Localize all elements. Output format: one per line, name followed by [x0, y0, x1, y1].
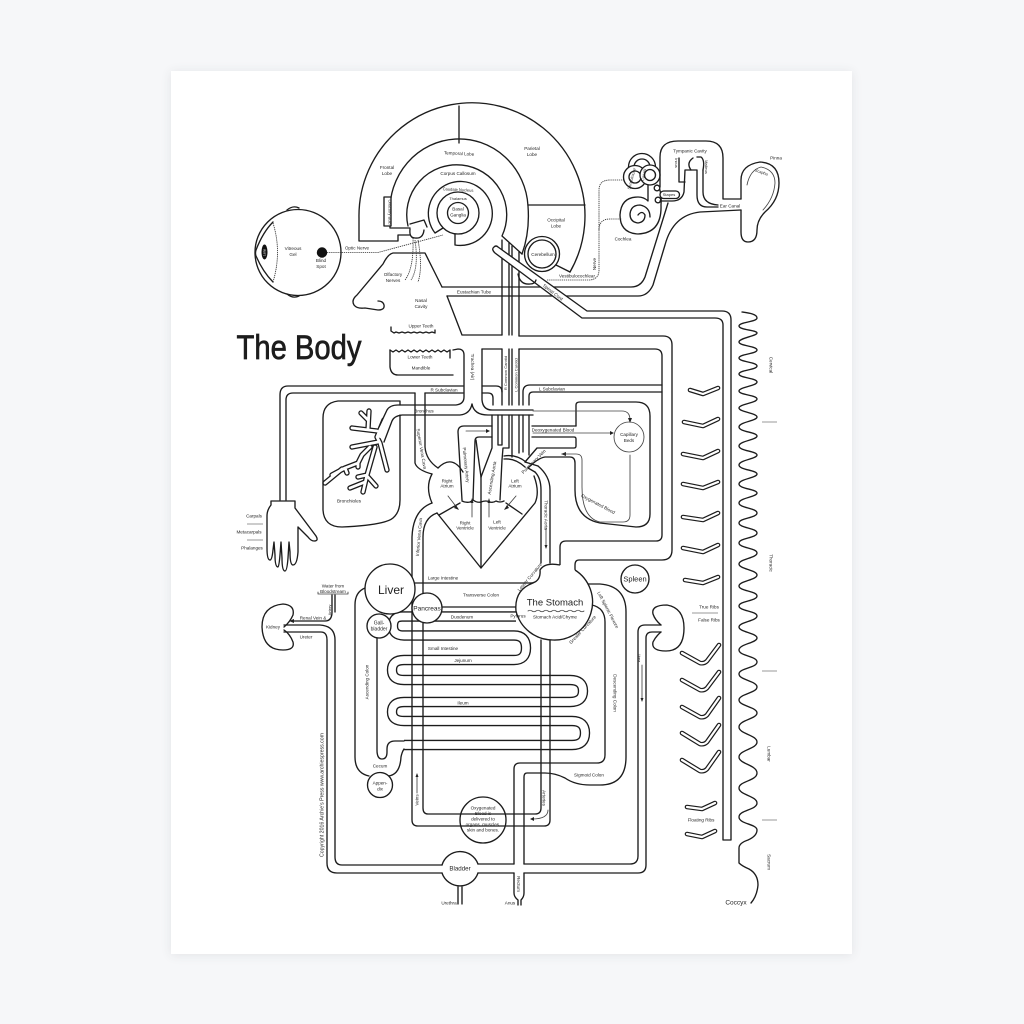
torso labels: Right [460, 520, 471, 526]
outer ear pinna [741, 162, 779, 242]
lower body labels [414, 790, 546, 906]
torso labels: dix [377, 786, 384, 792]
organ name labels: Greater Curvature [568, 614, 597, 645]
nose and nasal cavity [353, 253, 502, 335]
kidney labels: Kidney [266, 624, 281, 630]
pulmonary circulation loop [525, 402, 650, 527]
spinal cord [493, 246, 731, 840]
organ name labels: Descending Colon [612, 674, 618, 712]
brain labels [262, 146, 565, 328]
organ name labels: Gall- [374, 620, 385, 626]
torso labels: Large Intestine [428, 576, 459, 580]
torso labels: Pylorus [510, 614, 526, 618]
brain labels: Cerebellum [531, 252, 555, 257]
organ name labels: Pancreas [413, 606, 441, 612]
ear labels: Nerve [592, 257, 597, 270]
brain labels: Blind [316, 258, 327, 263]
organ name labels: Left Splenic Flexure [596, 591, 620, 629]
torso labels: R Common Carotid [503, 356, 508, 390]
ear labels: Malleus [704, 160, 709, 174]
brain labels: Occipital [547, 218, 565, 222]
heart [428, 456, 538, 568]
torso labels: Metacarpals [236, 530, 262, 534]
flow arrows [289, 411, 644, 821]
lower body labels: Veins [414, 794, 420, 806]
brain labels: Lobe [527, 152, 538, 157]
brain labels: Cavity [415, 304, 428, 309]
kidney labels: Urea [637, 654, 642, 663]
torso labels: Appen- [373, 780, 388, 786]
brain labels: Corpus Callosum [440, 171, 476, 176]
organ name labels: bladder [371, 626, 388, 632]
kidney labels: Artery [327, 605, 332, 615]
torso labels: Pulmonary Vein [520, 448, 547, 475]
brain labels: Spinal Cord [542, 283, 564, 302]
torso labels: Thoracic Aorta [544, 500, 548, 530]
kidney labels: Bloodstream [320, 589, 346, 594]
lower body labels: Arteries [542, 790, 546, 807]
kidneys [262, 604, 684, 651]
brain labels: Lens [262, 249, 266, 256]
skeleton labels: Coccyx [725, 900, 747, 906]
brain labels: Caudate Nucleus [443, 186, 474, 193]
stomach [516, 564, 593, 640]
vestibulocochlear nerve [547, 180, 627, 280]
torso labels: Deoxygenated Blood [532, 428, 575, 432]
brain labels: Eustachian Tube [457, 290, 492, 294]
inner and middle ear [620, 141, 741, 234]
lung outline [323, 401, 400, 527]
torso labels: Right [442, 478, 453, 484]
lower body labels: Blood is [475, 811, 492, 816]
torso labels: Trachea (Air) [470, 354, 475, 381]
eye [255, 207, 443, 297]
brain [359, 103, 585, 282]
title: The Body [236, 329, 362, 367]
blood vessels: veins and arteries [280, 240, 662, 826]
torso labels: Oxygenated Blood [580, 493, 616, 515]
brain labels: Vitreous [285, 246, 302, 251]
torso labels: Cecum [373, 764, 387, 768]
organ name labels: Sigmoid Colon [574, 772, 604, 778]
white poster sheet [171, 71, 852, 954]
bladder [442, 852, 478, 886]
organ name labels: Bladder [449, 866, 471, 872]
kidney labels [266, 584, 642, 663]
digestive organs [365, 564, 649, 798]
torso labels: Pulmonary Artery [462, 447, 470, 484]
organ name labels [371, 562, 647, 872]
torso labels: Jejunum [454, 658, 472, 663]
torso labels: Beds [624, 438, 635, 443]
brain labels: Upper Teeth [409, 324, 434, 328]
ureters and urinary tract [284, 595, 661, 904]
torso labels: Bronchioles [337, 498, 362, 504]
brain labels: Temporal Lobe [444, 150, 475, 157]
torso labels: Ventricle [488, 526, 506, 530]
brain labels: Nerves [386, 278, 401, 283]
brain labels: Thalamus [449, 196, 467, 201]
torso labels: Transverse Colon [463, 592, 499, 598]
hand [267, 501, 317, 571]
kidney labels: Water from [322, 584, 344, 588]
ear labels: Vestibulocochlear [559, 274, 595, 278]
lower body labels: delivered to [471, 816, 495, 822]
torso labels: Atrium [508, 484, 522, 488]
skeleton labels: Thoracic [768, 554, 774, 573]
spine [739, 312, 758, 903]
torso labels: Lower Teeth [408, 354, 433, 360]
torso labels: L Common Carotid [514, 358, 518, 392]
organ name labels: Liver [378, 583, 404, 597]
section tick marks [247, 422, 777, 820]
torso labels: Bronchus [414, 408, 434, 414]
skeleton labels: Lumbar [766, 746, 772, 762]
lower body labels: skin and bones. [467, 828, 499, 832]
torso labels: Small Intestine [428, 646, 459, 651]
torso labels: Ascending Aorta [487, 461, 497, 495]
teeth and mandible [379, 327, 533, 442]
torso labels: Ventricle [456, 526, 474, 530]
skeleton labels: Cervical [768, 357, 774, 373]
brain labels: Basal [452, 206, 464, 212]
brain labels: Gel [289, 252, 297, 257]
brain labels: Spot [316, 264, 326, 269]
torso labels: Left [493, 520, 502, 524]
small intestine tube [392, 616, 585, 745]
ear labels: Cochlea [615, 236, 632, 242]
ear labels: Stapes [663, 192, 675, 197]
ear labels: Pinna [770, 156, 782, 160]
skeleton labels [688, 357, 774, 906]
torso labels: Ileum [457, 700, 469, 706]
ear labels: Semicircular [626, 167, 637, 190]
torso labels: Carpals [246, 514, 263, 518]
torso labels: Inferior Vena Cava [415, 517, 423, 556]
torso labels: Phalanges [241, 546, 264, 550]
skeleton labels: Sacrum [766, 854, 772, 870]
torso labels: Capillary [620, 432, 639, 437]
skeleton labels: Floating Ribs [688, 818, 715, 822]
brain labels: Frontal [380, 165, 394, 170]
torso labels: R Subclavian [430, 388, 458, 392]
lower body labels: organs, muscles, [466, 822, 500, 827]
cerebellum [524, 236, 570, 272]
torso labels: Duodenum [451, 614, 473, 620]
torso labels: L Subclavian [539, 386, 566, 392]
kidney labels: Ureter [300, 634, 313, 640]
brain labels: Lobe [382, 171, 393, 176]
ear labels [559, 148, 782, 278]
brain labels: Olfactory [384, 272, 403, 277]
brain labels: Optic Nerve [345, 246, 370, 250]
torso labels: Left [511, 478, 520, 484]
torso labels: Superior Vena Cava [415, 428, 428, 470]
lower body labels: Urethra [441, 900, 457, 906]
oxygenated blood circle [460, 797, 506, 843]
ear labels: Tympanic Cavity [673, 148, 708, 154]
torso labels: Ascending Colon [364, 664, 370, 699]
brain labels: Olfactory Bulb [388, 199, 392, 225]
ear labels: Canals [640, 168, 647, 181]
brain labels: Ganglia [450, 212, 466, 218]
lung bronchial tree [325, 411, 388, 492]
torso labels [236, 354, 639, 792]
lower body labels: Oxygenated [471, 806, 496, 810]
ear labels: Incus [674, 158, 679, 168]
capillary beds [614, 422, 644, 452]
brain labels: Lobe [551, 224, 562, 228]
organ name labels: Lesser Curvature [517, 562, 543, 592]
skeleton labels: True Ribs [699, 604, 720, 610]
brain labels: Nasal [415, 298, 427, 303]
kidney labels: Renal Vein & [300, 616, 326, 620]
lower body labels: Rectum [516, 876, 521, 892]
organ name labels: Stomach Acid/Chyme [533, 614, 577, 620]
esophagus [519, 336, 672, 571]
eustachian tube [442, 203, 741, 296]
organ name labels: Spleen [623, 574, 647, 584]
skeleton labels: False Ribs [698, 618, 721, 622]
ear labels: Ear Canal [720, 204, 740, 208]
torso labels: Atrium [440, 484, 454, 488]
lower body labels: Anus [505, 900, 516, 906]
large intestine colon lines [355, 571, 626, 905]
brain labels: Parietal [524, 146, 540, 151]
copyright: Copyright 2016 Archie's Press www.archiespress.com [320, 733, 326, 857]
ribs [682, 388, 719, 837]
organ name labels: The Stomach [527, 598, 583, 608]
ear labels: Scapha [754, 167, 769, 177]
torso labels: Mandible [412, 366, 431, 370]
